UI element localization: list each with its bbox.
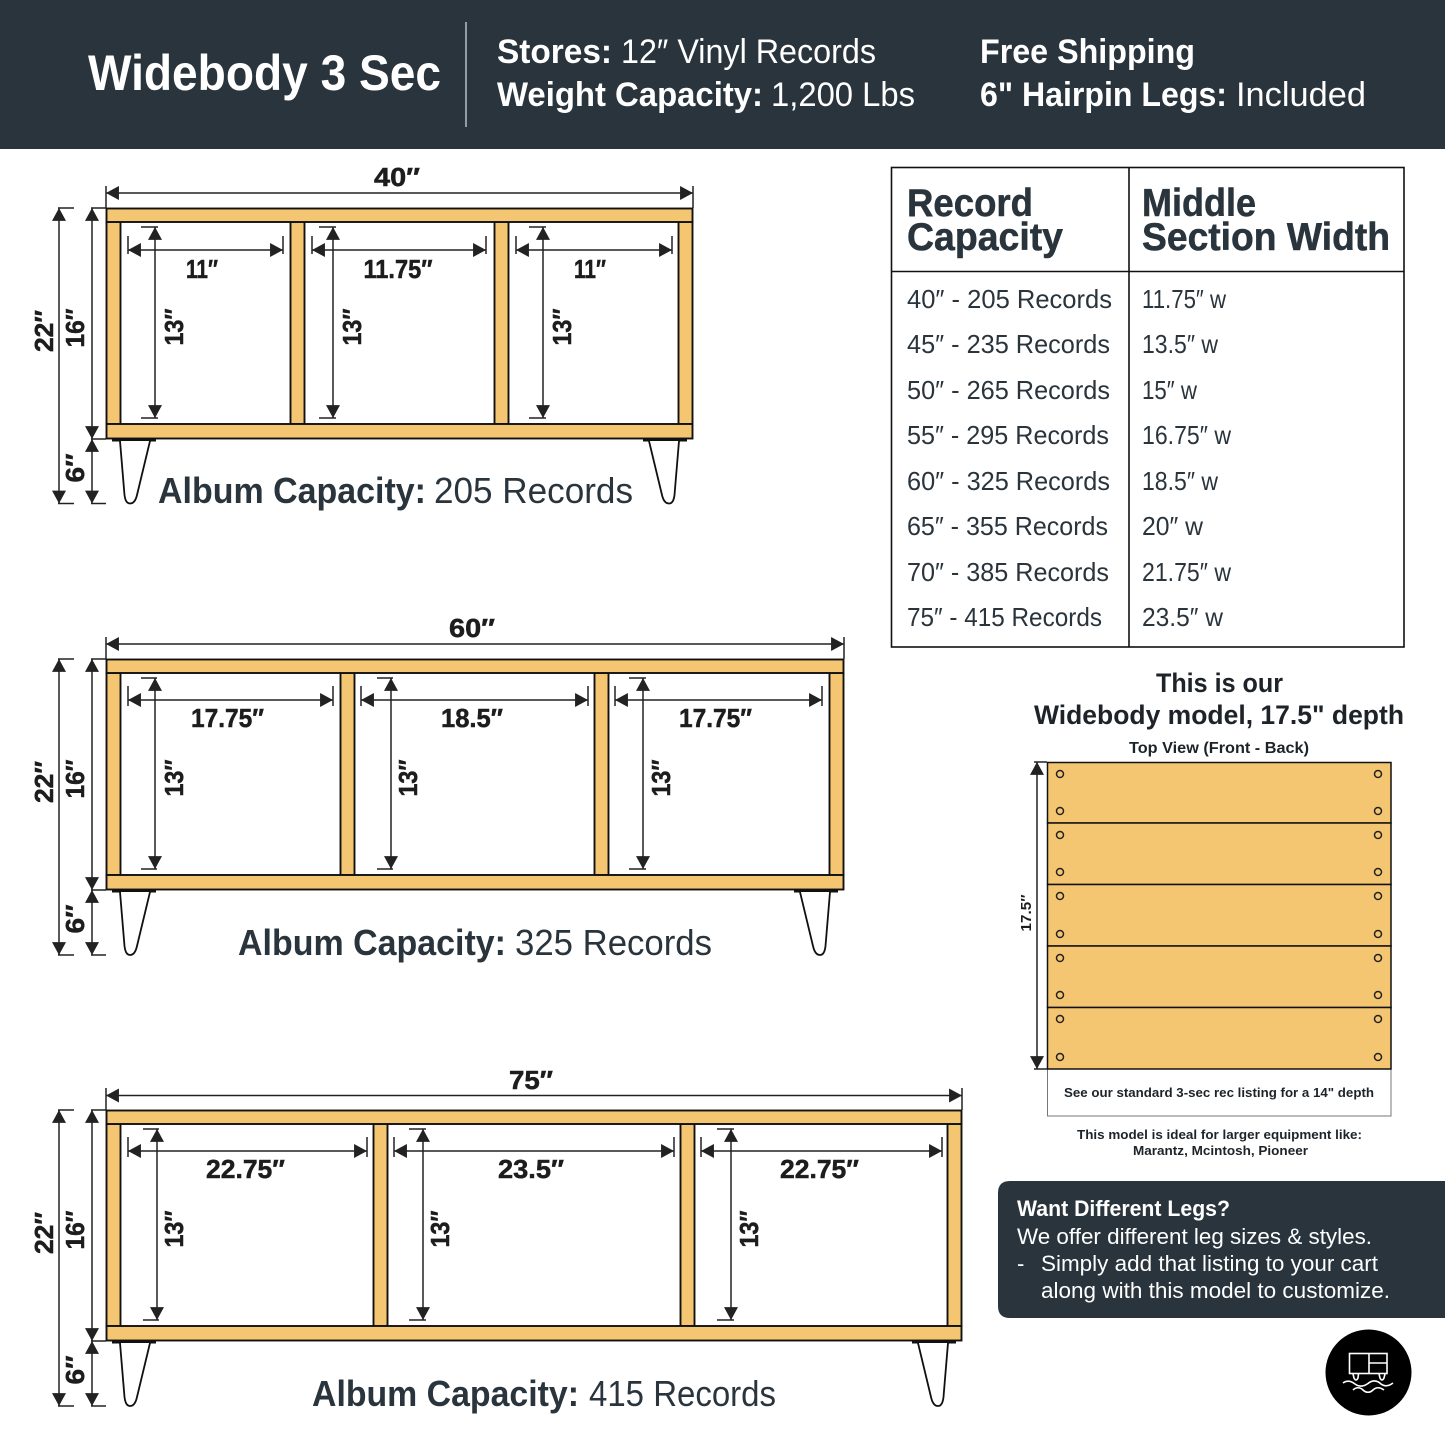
specs: stores and weight: 12″ Vinyl Records xyxy=(621,33,876,71)
section dimensions: 13″ xyxy=(337,308,367,346)
table column: section widths: 11.75″ w xyxy=(1142,284,1226,314)
overall dimensions: 6″ xyxy=(60,453,90,483)
section dimensions: 13″ xyxy=(646,760,676,796)
overall dimensions: 6″ xyxy=(60,904,90,934)
callout: different legs: We offer different leg sizes & styles. xyxy=(1017,1224,1372,1249)
section dimensions: 22.75″ xyxy=(206,1154,285,1184)
standard depth note: See our standard 3-sec rec listing for a 14" depth xyxy=(1064,1085,1374,1100)
table column: record capacities xyxy=(907,284,1112,632)
table column: record capacities: 55″ - 295 Records xyxy=(907,420,1109,450)
overall dimensions xyxy=(29,613,844,955)
overall dimensions: 60″ xyxy=(449,613,495,643)
table column: section widths: 23.5″ w xyxy=(1142,602,1223,632)
overall dimensions: 16″ xyxy=(60,760,90,798)
section dimensions xyxy=(128,678,822,869)
table header: record capacity: Record xyxy=(907,182,1033,225)
specs: stores and weight: Weight Capacity: xyxy=(497,76,763,114)
section dimensions: 11.75″ xyxy=(364,254,432,284)
overall dimensions: 16″ xyxy=(60,308,90,348)
icon: brand logo cabinet on waves xyxy=(1326,1330,1412,1416)
title: Widebody 3 Sec xyxy=(88,45,441,101)
screw holes xyxy=(1056,770,1382,1060)
overall dimensions xyxy=(29,1065,962,1406)
callout: different legs: Simply add that listing to your cart xyxy=(1041,1251,1378,1276)
section dimensions: 22.75″ xyxy=(780,1154,859,1184)
overall dimensions: 16″ xyxy=(60,1210,90,1250)
depth dimension: 17.5″ xyxy=(1018,895,1035,931)
section dimensions: 13″ xyxy=(159,1210,189,1248)
album capacity caption: 415 Records xyxy=(589,1373,776,1414)
table column: record capacities: 60″ - 325 Records xyxy=(907,466,1110,496)
section dimensions: 13″ xyxy=(159,760,189,796)
equipment note: Marantz, Mcintosh, Pioneer xyxy=(1133,1144,1308,1158)
overall dimensions: 22″ xyxy=(29,761,59,803)
equipment note xyxy=(1077,1128,1362,1158)
table column: section widths: 20″ w xyxy=(1142,511,1203,541)
table column: record capacities: 65″ - 355 Records xyxy=(907,511,1108,541)
table header: middle section width: Section Width xyxy=(1142,216,1390,259)
specs: stores and weight xyxy=(497,33,915,114)
table header: record capacity: Capacity xyxy=(907,216,1063,259)
overall dimensions xyxy=(29,162,693,504)
depth dimension xyxy=(1018,762,1047,1069)
table column: record capacities: 75″ - 415 Records xyxy=(907,602,1102,632)
album capacity caption: 205 Records xyxy=(434,470,633,511)
table column: record capacities: 45″ - 235 Records xyxy=(907,329,1110,359)
table header: middle section width xyxy=(1142,182,1390,259)
table column: section widths: 15″ w xyxy=(1142,375,1197,405)
table column: record capacities: 40″ - 205 Records xyxy=(907,284,1112,314)
panel: 75 inch cabinet diagram xyxy=(29,1065,962,1414)
table column: section widths: 13.5″ w xyxy=(1142,329,1218,359)
capacity table xyxy=(891,167,1404,647)
equipment note: This model is ideal for larger equipment like: xyxy=(1077,1128,1362,1142)
specs: shipping and legs: Free Shipping xyxy=(980,33,1195,71)
album capacity caption xyxy=(238,922,712,963)
section dimensions: 17.75″ xyxy=(191,703,264,733)
hairpin legs xyxy=(112,1340,956,1406)
section dimensions: 13″ xyxy=(393,760,423,796)
table header: record capacity xyxy=(907,182,1063,259)
panel: 40 inch cabinet diagram xyxy=(29,162,693,511)
section dimensions: 11″ xyxy=(186,254,218,284)
section dimensions: 17.75″ xyxy=(679,703,752,733)
top view label: Top View (Front - Back) xyxy=(1129,740,1309,757)
overall dimensions: 22″ xyxy=(29,310,59,352)
overall dimensions: 75″ xyxy=(509,1065,553,1095)
callout: different legs xyxy=(998,1181,1445,1318)
album capacity caption: 325 Records xyxy=(515,922,712,963)
widebody model heading xyxy=(1034,668,1404,730)
section dimensions xyxy=(128,1129,942,1320)
callout: different legs: - xyxy=(1017,1251,1024,1276)
section dimensions: 23.5″ xyxy=(498,1154,564,1184)
header banner xyxy=(0,0,1445,149)
overall dimensions: 40″ xyxy=(374,162,420,192)
specs: shipping and legs xyxy=(980,33,1366,114)
section dimensions xyxy=(128,227,672,418)
section dimensions: 13″ xyxy=(159,308,189,346)
cabinet frame xyxy=(106,208,692,438)
album capacity caption xyxy=(312,1373,776,1414)
section dimensions: 13″ xyxy=(734,1210,764,1248)
specs: stores and weight: Stores: xyxy=(497,33,612,71)
album capacity caption: Album Capacity: xyxy=(238,922,506,963)
album capacity caption xyxy=(158,470,633,511)
album capacity caption: Album Capacity: xyxy=(312,1373,579,1414)
callout: different legs: along with this model to customize. xyxy=(1041,1278,1390,1303)
overall dimensions: 22″ xyxy=(29,1212,59,1254)
section dimensions: 13″ xyxy=(425,1210,455,1248)
specs: shipping and legs: 6" Hairpin Legs: xyxy=(980,76,1227,114)
panel: 60 inch cabinet diagram xyxy=(29,613,844,963)
table header: middle section width: Middle xyxy=(1142,182,1256,225)
table column: record capacities: 70″ - 385 Records xyxy=(907,557,1109,587)
table column: section widths: 21.75″ w xyxy=(1142,557,1231,587)
section dimensions: 13″ xyxy=(547,308,577,346)
cabinet frame xyxy=(106,1110,962,1340)
widebody model heading: Widebody model, 17.5" depth xyxy=(1034,700,1404,730)
section dimensions: 11″ xyxy=(574,254,606,284)
overall dimensions: 6″ xyxy=(60,1355,90,1385)
planks xyxy=(1048,762,1391,1069)
widebody model heading: This is our xyxy=(1156,668,1283,698)
table column: section widths: 16.75″ w xyxy=(1142,420,1231,450)
album capacity caption: Album Capacity: xyxy=(158,470,426,511)
specs: shipping and legs: Included xyxy=(1236,76,1366,114)
hairpin legs xyxy=(112,890,838,955)
top view diagram xyxy=(1018,762,1391,1116)
table column: record capacities: 50″ - 265 Records xyxy=(907,375,1110,405)
hairpin legs xyxy=(112,438,687,504)
cabinet frame xyxy=(106,660,844,890)
table column: section widths xyxy=(1142,284,1231,632)
section dimensions: 18.5″ xyxy=(441,703,503,733)
specs: stores and weight: 1,200 Lbs xyxy=(771,76,915,114)
callout: different legs: Want Different Legs? xyxy=(1017,1196,1230,1221)
table column: section widths: 18.5″ w xyxy=(1142,466,1218,496)
